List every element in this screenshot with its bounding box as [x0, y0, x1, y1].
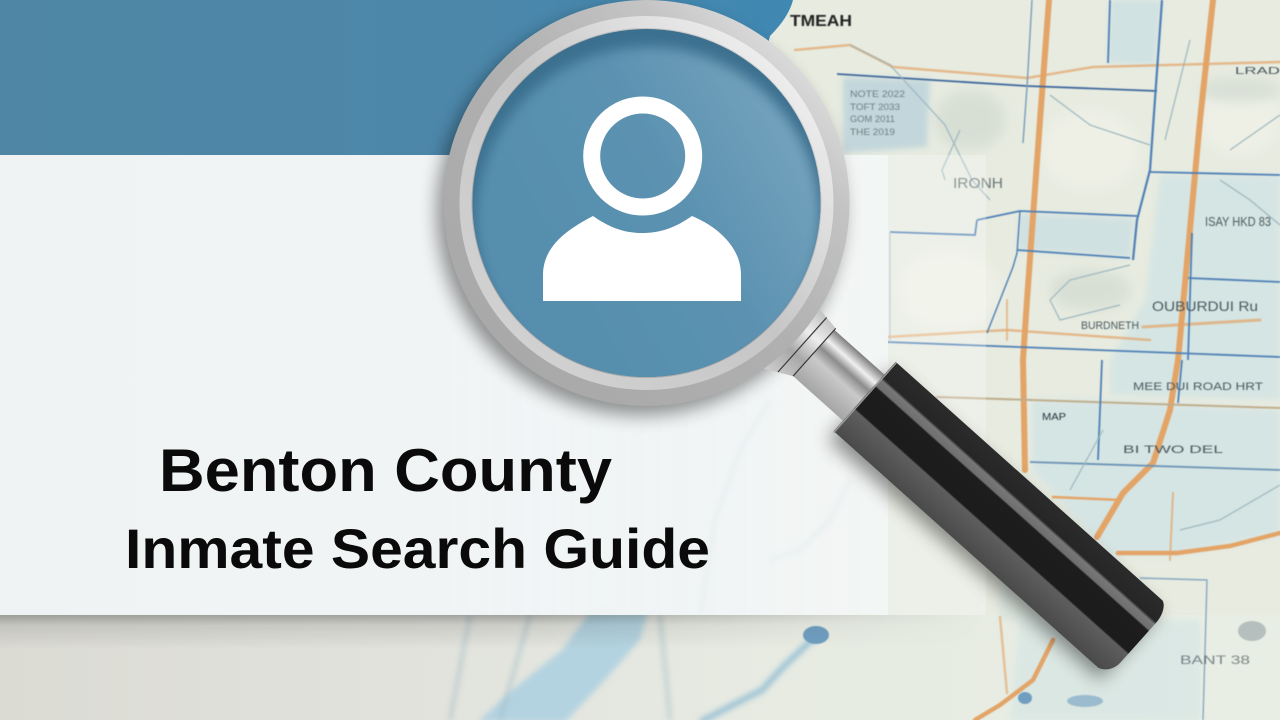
title line 2: Inmate Search Guide	[125, 517, 710, 580]
lens glass	[472, 28, 822, 391]
person body	[543, 216, 741, 301]
map place labels: BANT 38	[1180, 653, 1250, 667]
person head	[592, 105, 694, 207]
lens rim	[444, 0, 850, 406]
title	[125, 437, 710, 580]
map place labels: LRAD	[1235, 66, 1280, 77]
lens inner face	[476, 47, 820, 391]
white title panel	[0, 155, 888, 615]
map place labels: OUBURDUI Ru	[1152, 298, 1258, 314]
river blurred	[478, 612, 648, 720]
bottom strip with blurred map	[450, 612, 1103, 720]
magnifier shadow	[437, 9, 1160, 680]
secondary translucent panel	[886, 155, 986, 615]
map place labels: NOTE 2022	[850, 89, 905, 99]
title line 1: Benton County	[159, 437, 613, 504]
map lake	[1238, 621, 1266, 641]
map place labels: MAP	[1042, 412, 1066, 423]
metal shaft	[792, 329, 887, 423]
handle rim	[834, 363, 896, 433]
map place labels: TOFT 2033	[850, 102, 900, 112]
map tinted areas	[770, 0, 1280, 720]
map place labels: BI TWO DEL	[1123, 444, 1223, 456]
map place labels	[790, 13, 1280, 667]
blue header band	[0, 0, 793, 155]
map place labels: TMEAH	[790, 13, 852, 30]
rim highlight	[466, 22, 828, 384]
map place labels: THE 2019	[850, 127, 895, 137]
panel shadow	[0, 615, 926, 641]
black handle	[834, 362, 1170, 676]
map place labels: GOM 2011	[850, 114, 895, 124]
magnifying glass	[444, 0, 1170, 677]
paler map blotches	[900, 85, 1280, 330]
map lines blurred	[450, 615, 670, 720]
map place labels: BURDNETH	[1081, 320, 1139, 332]
map place labels: MEE DUI ROAD HRT	[1133, 381, 1263, 393]
map roads	[795, 0, 1280, 720]
grey-green map blotches	[935, 78, 1280, 310]
map place labels: IRONH	[953, 175, 1003, 192]
person icon	[543, 105, 741, 301]
handle assembly	[761, 298, 1170, 677]
water dots	[803, 626, 1103, 707]
map background	[770, 0, 1280, 720]
map boundaries	[837, 0, 1280, 720]
metal collar	[761, 306, 838, 387]
lens dark edge	[472, 28, 822, 378]
faint map through panel	[700, 400, 850, 615]
map thin rivers	[850, 40, 1280, 530]
tributary blurred	[700, 636, 816, 720]
